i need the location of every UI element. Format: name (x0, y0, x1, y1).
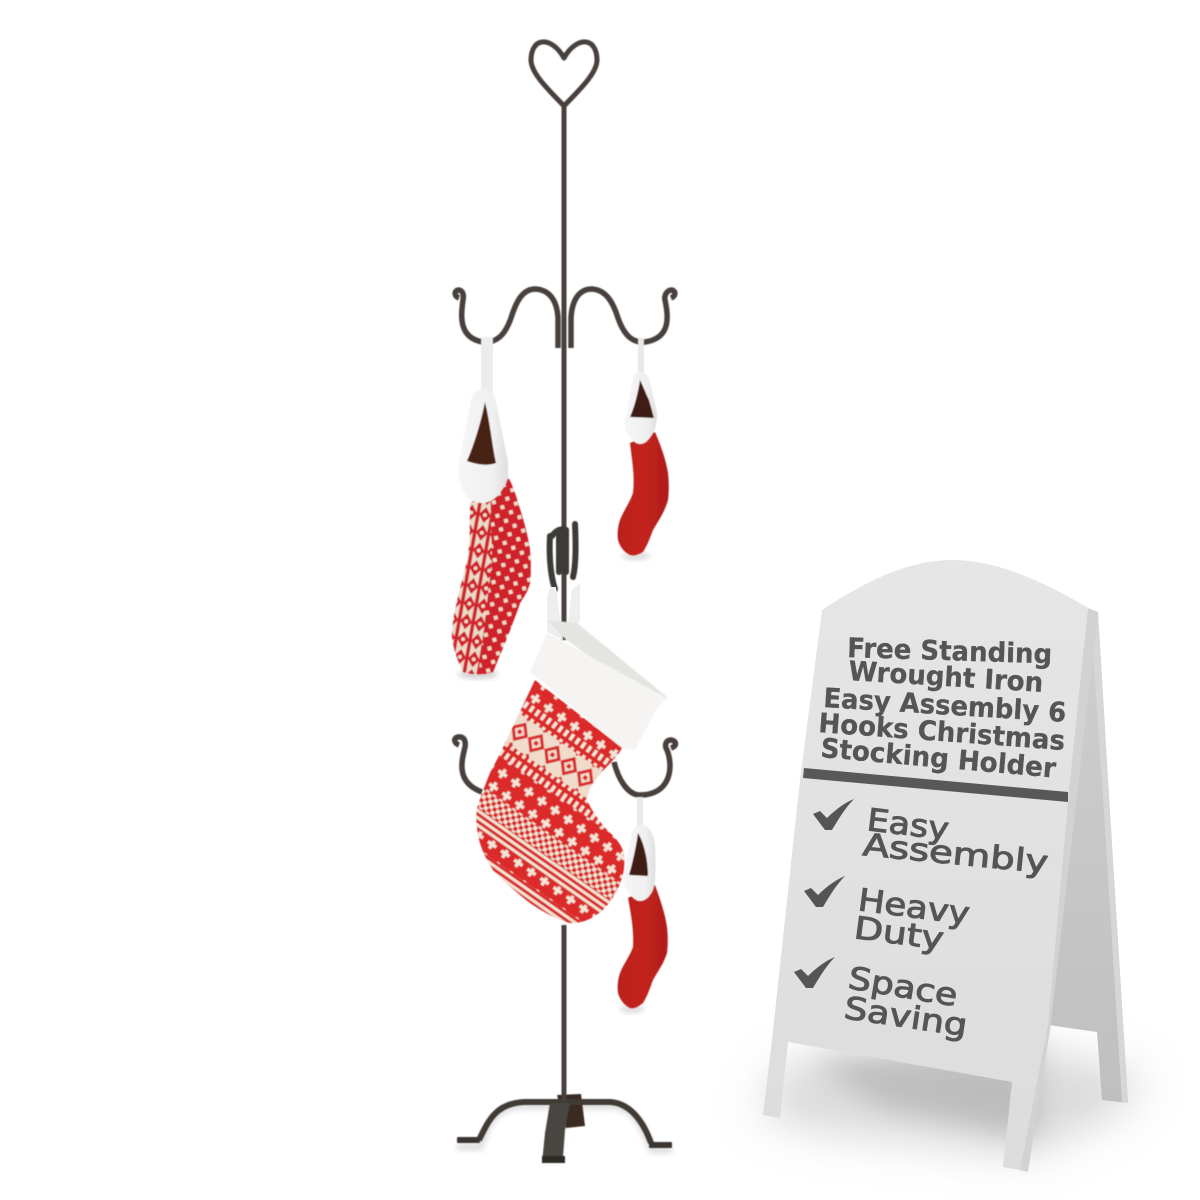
center pole lower (562, 925, 566, 1101)
ground shadow core (810, 1040, 1040, 1140)
stand base (457, 1094, 672, 1163)
stocking: large patterned left (451, 337, 532, 681)
stocking holder stand (455, 42, 676, 1163)
stocking: small red lower right (618, 797, 668, 1013)
divider bar (803, 768, 1068, 802)
ground shadow (755, 1050, 1145, 1155)
feature: space saving: Saving (842, 990, 970, 1044)
front panel (763, 560, 1088, 1170)
sign title: Wrought Iron (848, 656, 1044, 699)
center pole upper (562, 104, 566, 640)
white cuff (623, 825, 655, 901)
red sock body (618, 432, 669, 555)
hanging strap (638, 338, 644, 374)
feature: easy assembly: Easy (865, 802, 951, 848)
check: easy assembly (813, 799, 854, 830)
opening (467, 402, 496, 465)
opening (630, 380, 654, 418)
center clip (550, 524, 576, 589)
red sock body (618, 885, 668, 1008)
lower hooks (455, 737, 676, 795)
strap: large stocking (547, 583, 580, 640)
sign title: Easy Assembly 6 (823, 683, 1067, 729)
check: heavy duty (804, 876, 845, 907)
feature: heavy duty: Heavy (856, 882, 972, 933)
feature: easy assembly (861, 802, 1050, 881)
hanging strap (481, 337, 493, 395)
sandwich board sign (755, 560, 1145, 1172)
white cuff (530, 633, 667, 750)
feature: space saving (842, 960, 970, 1044)
sign title: Free Standing (847, 633, 1053, 670)
knit sock body (451, 477, 532, 676)
check: space saving (794, 957, 835, 988)
feature: heavy duty: Duty (852, 910, 946, 958)
white cuff (625, 372, 657, 444)
stocking: large red and cream (476, 620, 667, 924)
feature: heavy duty (852, 882, 972, 958)
hanging strap (637, 797, 643, 827)
sign title: Hooks Christmas (817, 708, 1066, 757)
feature: space saving: Space (846, 960, 960, 1014)
upper hooks (455, 289, 675, 348)
opening (629, 833, 648, 876)
front panel edge (1020, 608, 1098, 1172)
sign title: Stocking Holder (819, 733, 1058, 785)
knit sock body (476, 680, 626, 924)
sign title (817, 633, 1067, 785)
white cuff (459, 390, 508, 503)
back of cuff (547, 620, 667, 708)
stocking: small red upper right (618, 338, 669, 560)
back panel (1048, 612, 1128, 1103)
heart finial (531, 42, 597, 106)
back panel edge (1090, 612, 1128, 1103)
feature: easy assembly: Assembly (861, 827, 1050, 881)
